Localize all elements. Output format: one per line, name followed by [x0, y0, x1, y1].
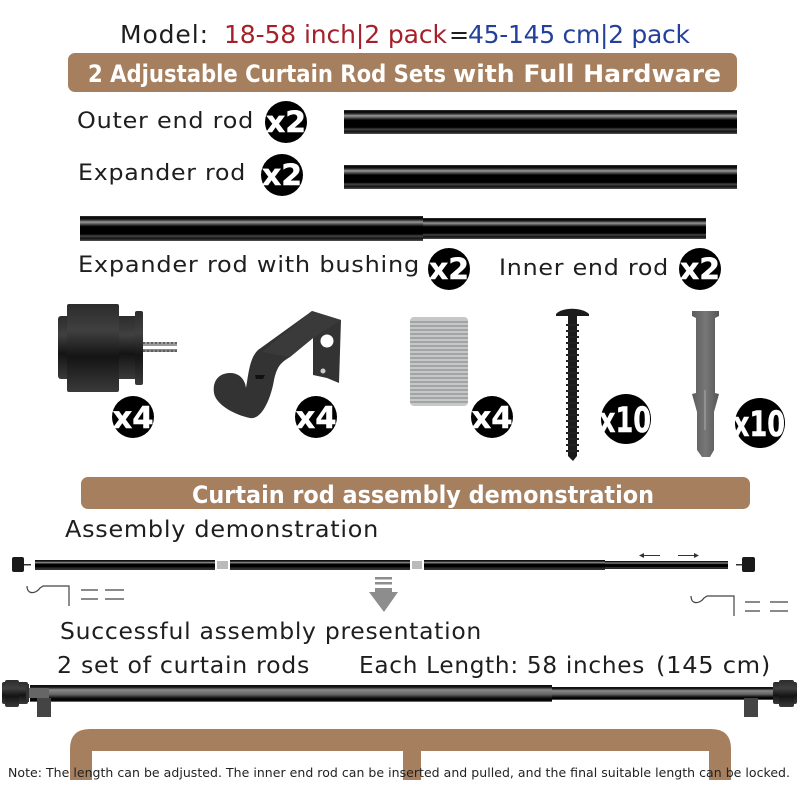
expander rod with bushing: x2: [429, 252, 469, 286]
badge: x10 screw: x10: [599, 401, 651, 441]
icon: wall anchor: [692, 311, 719, 457]
expander rod with bushing: [78, 216, 706, 290]
badge: x10 screw: [599, 394, 651, 444]
badge: x4 bracket: x4: [296, 401, 336, 436]
label: successful assembly: Successful assembly presentation: [60, 619, 482, 645]
heading banner: hardware: [68, 53, 737, 92]
heading banner: hardware: 2 Adjustable Curtain Rod Sets: [88, 60, 446, 88]
label: each length: (145 cm): [656, 653, 771, 679]
icon: screw: [556, 309, 589, 461]
badge: x10 anchor: [733, 398, 785, 448]
heading banner: assembly demonstration: Curtain rod assembly demonstration: [192, 481, 654, 509]
label: 2 set of curtain rods: 2 set of curtain rods: [57, 653, 310, 679]
label: assembly demonstration: Assembly demonstration: [65, 517, 379, 543]
badge: x4 connector: x4: [472, 401, 512, 436]
arrow: assembly down: [369, 577, 398, 612]
heading banner: hardware: with Full Hardware: [453, 60, 721, 88]
expander rod with bushing: Expander rod with bushing: [78, 253, 420, 278]
note: Note: The length can be adjusted. The inner end rod can be inserted and pulled, and the final suitable length can be locked.: [8, 765, 790, 780]
expander rod row: Expander rod: [78, 161, 246, 186]
icon: threaded connector: [410, 317, 468, 406]
expander rod row: [78, 154, 737, 196]
icon: left bracket and screws outline: [27, 586, 124, 606]
icon: finial end cap: [58, 304, 177, 392]
inner end rod label: Inner end rod: [499, 256, 669, 281]
icon: right bracket and screws outline: [691, 596, 788, 616]
expander rod row: x2: [262, 158, 302, 192]
outer end rod row: [77, 101, 737, 143]
title: model line: 45-145 cm|2 pack: [468, 20, 691, 49]
inner end rod label: x2: [680, 252, 720, 286]
brown frame: [70, 729, 731, 780]
outer end rod row: x2: [266, 105, 306, 139]
title: model line: =: [449, 21, 469, 49]
outer end rod row: Outer end rod: [77, 109, 254, 134]
arrows: adjust direction: [639, 553, 699, 558]
title: model line: 18-58 inch|2 pack: [224, 20, 448, 49]
badge: x4 finial: x4: [112, 401, 154, 436]
label: each length: [359, 653, 771, 679]
inner end rod label: [499, 248, 721, 290]
title: model line: [120, 20, 691, 49]
heading banner: assembly demonstration: [81, 477, 750, 509]
title: model line: Model:: [120, 20, 208, 49]
exploded rod diagram: [12, 557, 755, 572]
icon: curtain rod bracket: [214, 311, 341, 418]
assembled curtain rod: [2, 680, 797, 717]
label: each length: Each Length: 58 inches: [359, 653, 645, 679]
